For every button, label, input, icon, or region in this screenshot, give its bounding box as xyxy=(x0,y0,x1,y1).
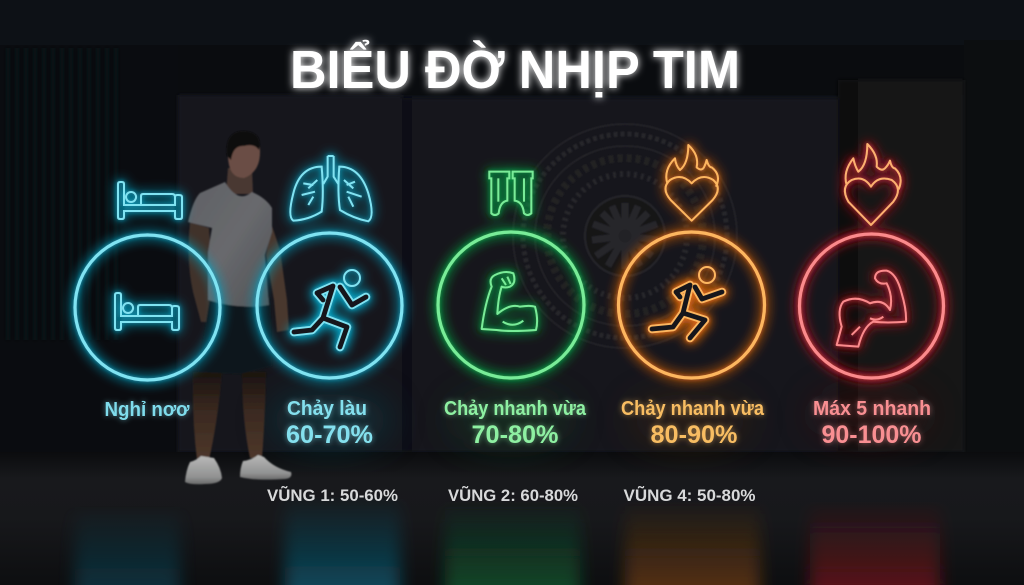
zone note 1: VŨNG 1: 50-60% xyxy=(267,485,398,505)
icon: runner xyxy=(652,267,722,338)
label: fast green: Chảy nhanh vừa xyxy=(444,398,587,420)
ring: rest xyxy=(75,235,220,380)
icon: flaming heart xyxy=(665,145,718,221)
ring: long run xyxy=(257,233,402,378)
ring: orange xyxy=(618,232,764,378)
label: fast orange: 80-90% xyxy=(650,421,738,449)
decorative bronze drum mandala xyxy=(513,124,737,348)
label: rest: Nghỉ nơơ xyxy=(104,399,190,421)
zone 2: green xyxy=(438,172,584,378)
zone 1: long run xyxy=(257,156,402,378)
icon: gate pillars xyxy=(489,172,533,215)
label: long run: 60-70% xyxy=(286,421,373,449)
label: long run: Chảy làu xyxy=(287,398,367,420)
icon: bed above circle xyxy=(118,182,182,219)
runner figure: athlete in gray shirt xyxy=(185,131,291,484)
icon: lungs xyxy=(290,156,372,221)
label: fast orange xyxy=(621,398,765,449)
icon: bed inside circle xyxy=(115,293,179,330)
zone note 2: VŨNG 2: 60-80% xyxy=(448,485,578,505)
ring: red xyxy=(800,234,944,378)
label: long run xyxy=(286,398,373,449)
zone note 4: VŨNG 4: 50-80% xyxy=(624,485,756,505)
ring: green xyxy=(438,232,584,378)
label: fast green: 70-80% xyxy=(472,421,558,449)
icon: flexed arm xyxy=(482,272,537,331)
icon: runner xyxy=(294,270,366,347)
zone 4: red xyxy=(800,144,944,378)
zone 0: rest xyxy=(75,182,220,380)
label: max red: 90-100% xyxy=(822,421,922,449)
label: max red: Máx 5 nhanh xyxy=(813,398,931,420)
zone 3: orange xyxy=(618,145,764,378)
label: fast green xyxy=(444,398,587,449)
title: BIỂU ĐỜ NHỊP TIM xyxy=(290,40,740,100)
icon: flaming heart xyxy=(845,144,901,225)
label: fast orange: Chảy nhanh vừa xyxy=(621,398,765,420)
icon: flexed arm xyxy=(837,271,906,347)
label: max red xyxy=(813,398,931,449)
